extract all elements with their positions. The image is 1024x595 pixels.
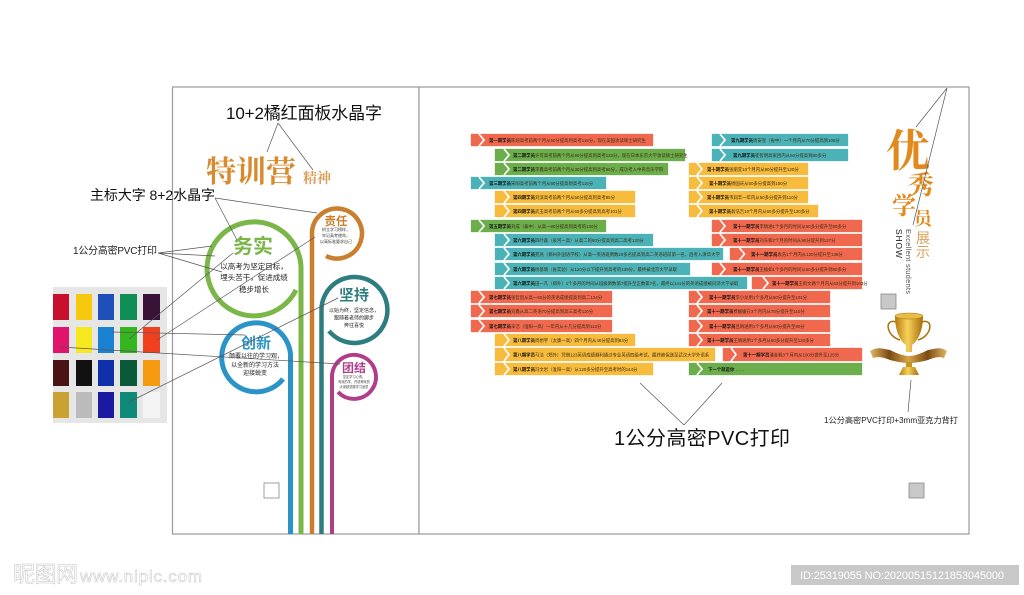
- text block: unity: [338, 360, 370, 389]
- panel: left board frame: [172, 87, 419, 534]
- marker: white square left: [264, 483, 279, 498]
- bar: student 23: [689, 205, 818, 217]
- heading: outstanding students: 学: [892, 186, 916, 221]
- bar: student 24: [712, 220, 862, 232]
- bar: student 24: 第十一期学员李炳涵1个多月的时间从50多分提升至80多分: [733, 223, 847, 230]
- heading: outstanding students: 员: [914, 205, 935, 231]
- leader lines: outstanding students heading: [913, 88, 947, 225]
- bar: next one is you: 下一个就是你 ……: [708, 366, 744, 373]
- heading: outstanding students: 优: [886, 115, 930, 179]
- text block: responsibility: 以高标准要求自己: [320, 238, 352, 244]
- heading: outstanding students: Excellent students: [904, 229, 913, 294]
- bar: student 18: 第九期学员周安宣（省中）一个月内从70分提高到105分: [731, 137, 840, 144]
- annotation: PVC print left: 1公分高密PVC打印: [73, 244, 157, 257]
- bar: student 9: [495, 248, 723, 260]
- bar: student 26: [730, 248, 862, 260]
- bar: student 15: [495, 334, 635, 346]
- bar: student 14: [471, 320, 612, 332]
- bar: student 5: 第四期学员刘滨高考前两个月从50分提高到高考95分: [513, 194, 616, 201]
- heading: outstanding students: 秀: [908, 165, 934, 202]
- text block: persistence: 跟随着老师的脚步: [334, 314, 374, 322]
- bar: student 7: 第五期学员刘成（泰中）从高一80分提高到高考的130分: [489, 223, 598, 230]
- bar: student 3: 第二期学员李鑫高考前两个月从30分提高到高考96分，成功考入中央音乐学院: [513, 166, 664, 173]
- leader lines: left board annotations: [60, 198, 340, 402]
- panel: right board frame: [419, 87, 969, 534]
- watermark: nipic logo: www.nipic.com: [79, 567, 202, 586]
- bar: student 20: 第十期学员张丽宜10个月内从90分提升至120分: [707, 166, 799, 173]
- annotation: PVC print bottom: 1公分高密PVC打印: [614, 427, 790, 450]
- bar: student 12: 第七期学员张哲因从高一60分的英语成绩提高到高二124分: [489, 294, 603, 301]
- text block: pragmatic: [220, 234, 288, 294]
- bar: student 20: [689, 163, 808, 175]
- text block: unity: 大家超进展学习品质: [340, 384, 369, 389]
- text block: persistence: [329, 287, 379, 329]
- bar: student 10: [495, 263, 690, 275]
- stem circle: teal: [322, 277, 387, 534]
- text block: unity: 坚定学习心得，: [343, 374, 365, 379]
- bar: student 32: 第十一期学员王炳涵用1个多月从60多分提升至120多分: [707, 337, 814, 344]
- heading: outstanding students: 示: [916, 244, 930, 260]
- bar: student 30: 第十一期学员费媛媛在3个月内从70分提升至110分: [707, 308, 805, 315]
- bar: student 4: 第三期学员宋阳高考前两个月从80分提高到高考115分: [489, 180, 594, 187]
- bar: student 1: 第一期学员陈煊高考前两个月从50分提高到高考118分，现在美国攻读硕士研究生: [489, 137, 646, 144]
- bar: student 14: 第七期学员辛洁（淮阳一高）一年内从十几分提高到113分: [489, 323, 602, 330]
- bar: student 30: [689, 305, 830, 317]
- heading: training camp spirit: 特训营: [206, 147, 296, 191]
- text block: innovation: 颠覆以往的学习观，: [229, 352, 283, 360]
- icon: golden trophy with ribbon: [870, 313, 947, 375]
- bar: student 6: 第四期学员武玉高考前两个月从60多分提高到高考101分: [513, 208, 622, 215]
- watermark: nipic logo: [13, 562, 202, 587]
- bar: student 23: 第十期学员翁浩吉10个月内从60多分提升至120多分: [709, 208, 810, 215]
- stem circle: magenta: [332, 355, 376, 534]
- bar: student 25: [712, 234, 862, 246]
- bar: student 15: 第八期学员周想宇（太康一高）四个月内从40分提高到83分: [513, 337, 629, 344]
- bar: student 8: [495, 234, 653, 246]
- bar: student 1: [471, 134, 653, 146]
- bar: student 2: 第二期学员许可高考前两个月从90分提高到高考132分，现在日本东京大学攻读硕士研究生: [513, 152, 688, 159]
- text block: innovation: 以全新的学习方法: [231, 361, 279, 369]
- bar: student 25: 第十一期学员刘东和2个月的时间从90分提升到127分: [733, 237, 836, 244]
- bar: next one is you: [689, 363, 862, 375]
- chart: growth tree with circular stems: [207, 209, 387, 534]
- annotation: main title lettering: 主标大字 8+2水晶字: [90, 187, 215, 203]
- color swatch sample board: [53, 287, 167, 423]
- annotation: PVC and acrylic backing: 1公分高密PVC打印+3mm亚克力背打: [824, 415, 958, 425]
- text block: pragmatic: 务实: [233, 234, 273, 258]
- watermark: image id: [791, 565, 1019, 585]
- text block: innovation: 迎接蜕变: [243, 369, 267, 377]
- text block: persistence: 奔往喜悦: [344, 322, 364, 329]
- text block: responsibility: 牢记高考使命，: [322, 232, 350, 238]
- bar: student 21: 第十期学员杨国庆从50多分提高到100分: [709, 180, 788, 187]
- bar: student 29: [689, 291, 830, 303]
- bar: student 28: [752, 277, 868, 289]
- bar: student 27: [712, 263, 862, 275]
- bar: student 17: 第八期学员冯文岩（淮阳一高）从120多分提升至高考时的144分: [513, 366, 638, 373]
- bar: student 31: [689, 320, 830, 332]
- bar: student 18: [712, 134, 848, 146]
- bar: student 33: [723, 348, 862, 361]
- marker: grey square top: [881, 294, 896, 309]
- bar: student 32: [689, 334, 830, 346]
- bar: student 33: 第十一期学员潘金帆3个月内从100分提升至125分: [743, 352, 840, 358]
- bar: student 7: [471, 220, 606, 232]
- bar: student 11: 第六期学员田一凡（郑外）1个多月的时间从班级倒数第7提升至正数第7名，最终以141分的英语成绩被同济大学录取: [513, 280, 739, 287]
- heading: training camp spirit: 精神: [303, 168, 331, 188]
- text block: pragmatic: 埋头苦干，促进成绩: [220, 272, 288, 282]
- bar: student 2: [495, 149, 688, 161]
- watermark: nipic logo: 昵图网: [13, 562, 78, 587]
- leader line: trophy: [908, 380, 911, 412]
- bar: student 12: [471, 291, 612, 303]
- bar: student 13: [471, 305, 612, 317]
- bar: student 22: 第十期学员韦润丰一年内从50多分提升到110分: [707, 194, 799, 201]
- bar: student 13: 第七期学员刘鑫从高二英语70分提高到高三高考110分: [489, 308, 594, 315]
- bar: student 19: 第九期学员崔智明高家团内从50分提高到80多分: [733, 152, 827, 159]
- bar: student 22: [689, 191, 808, 203]
- text block: responsibility: 责任: [324, 214, 348, 228]
- bar: student 5: [495, 191, 635, 203]
- bar: student 4: [471, 177, 606, 189]
- bar: student 21: [689, 177, 808, 189]
- bar: student 28: 第十一期学员王新文两个月内从53分提升到103分: [772, 280, 868, 287]
- bar: student 17: [495, 363, 653, 375]
- heading: outstanding students: 展: [916, 230, 930, 246]
- text block: responsibility: [320, 214, 352, 244]
- stem circle: blue: [222, 323, 290, 534]
- bar: student 29: 第十一期学员李小龙用1个多月从50分提升至101分: [709, 294, 808, 301]
- bar: student 8: 第六期学员四叶森（泉河一高）从高二的80分提高到高二高考120分: [513, 237, 644, 244]
- text block: persistence: 坚持: [339, 287, 369, 304]
- text block: responsibility: 树立学习榜样，: [322, 226, 350, 232]
- bar: student 11: [495, 277, 747, 289]
- heading: outstanding students: [886, 115, 935, 294]
- bar: student 26: 第十一期学员袁浩1个月内从120分提升至138分: [751, 251, 843, 258]
- bar: student 31: 第十一期学员吕炳涵用1个多月从60分提升至90分: [709, 323, 805, 330]
- bar: student 16: [495, 348, 715, 361]
- text block: persistence: 以始为终，坚定信念，: [329, 307, 379, 314]
- watermark: image id: ID:25319055 NO:20200515121853045000: [800, 570, 1004, 582]
- bar: student 10: 第六期学员杨基晓（省实验）从120分以下提升到高考的139分，最终被北京大学录取: [513, 266, 678, 273]
- leader lines: orange panel lettering: [267, 123, 313, 170]
- marker: grey square bottom: [909, 483, 924, 498]
- stem circle: orange: [312, 209, 362, 534]
- leader lines: bars annotation: [640, 383, 722, 425]
- heading: outstanding students: SHOW: [894, 229, 904, 258]
- bar: student 3: [495, 163, 668, 175]
- bar: student 16: 第八期学员马洁（郑外）凭借123英语成绩顺利通过专业英语四级考试，最终被保送至武汉大学外语系: [513, 352, 710, 358]
- bar: student 27: 第十一期学员王楠如1个多月的时间从50多分提升到80多分: [733, 266, 847, 273]
- bar: student 6: [495, 205, 635, 217]
- bar: student 9: 第六期学员苑兆（郑州外国语学校）从高一英语班倒数20多名提高到高二英语班前第一名，后考入清华大学: [513, 251, 720, 258]
- text block: innovation: 创新: [241, 334, 271, 352]
- text block: unity: 有效的学，开成神采的: [338, 379, 370, 384]
- text block: innovation: [229, 334, 283, 377]
- text block: pragmatic: 稳步增长: [239, 284, 269, 294]
- text block: pragmatic: 以高考为坚定目标，: [220, 261, 288, 271]
- text block: unity: 团结: [342, 360, 366, 375]
- annotation: orange panel lettering: 10+2橘红面板水晶字: [226, 104, 382, 123]
- stem circle: green: [207, 222, 301, 534]
- bar: student 19: [712, 149, 848, 161]
